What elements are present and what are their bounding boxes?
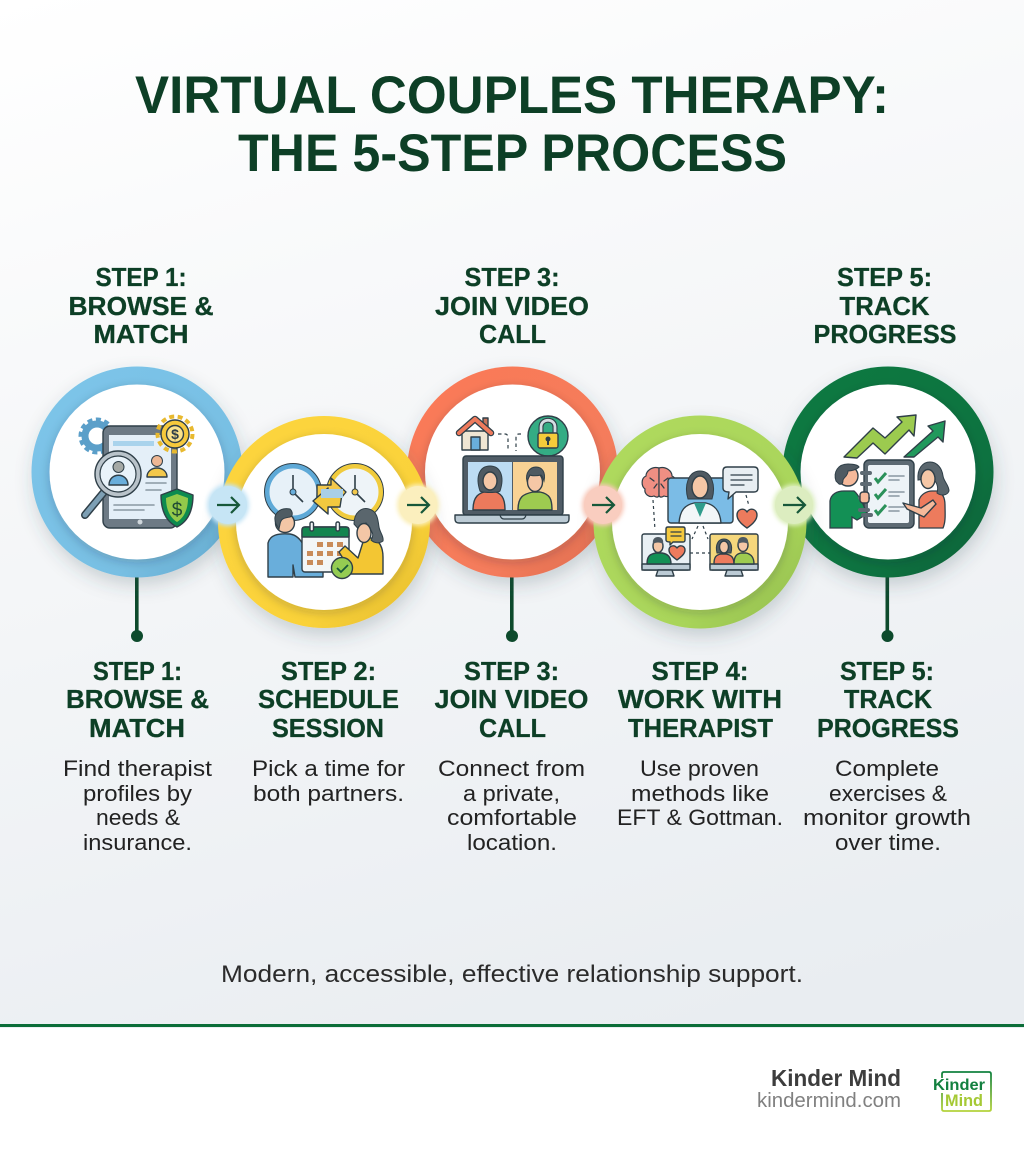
text block: step 2 [252,656,405,806]
text block: step 2: STEP 2: [281,656,376,686]
icon: laptop video call with house and lock [455,416,569,523]
top heading: step 5: STEP 5: [837,262,932,292]
icon: tablet search with gears and shield [80,416,193,528]
title: VIRTUAL COUPLES THERAPY: [135,66,889,125]
text block: step 4: STEP 4: [652,656,748,686]
top heading: step 1: BROWSE & [68,291,214,321]
text block: step 5: STEP 5: [840,656,934,686]
text block: step 3: a private, [463,781,560,806]
top heading: step 1: STEP 1: [96,262,186,292]
text block: step 2: SCHEDULE [258,684,399,714]
connector: step 5 [882,575,894,642]
text block: step 3: STEP 3: [464,656,559,686]
text block: step 4 [617,656,783,830]
text block: step 5: over time. [835,830,941,855]
text block: step 1: STEP 1: [93,656,182,686]
icon: tablet search with gears and shield: $ [171,426,179,442]
text block: step 5: PROGRESS [817,713,959,743]
logo: Kinder [933,1077,985,1094]
text block: step 1: insurance. [83,830,192,855]
top heading: step 5 [814,262,956,349]
title [135,66,889,183]
top heading: step 3: STEP 3: [464,262,560,292]
text block: step 1: needs & [96,805,180,830]
text block: step 4: THERAPIST [628,713,773,743]
text block: step 3: location. [467,830,557,855]
text block: step 5: monitor growth [803,805,971,830]
text block: step 4: methods like [631,781,769,806]
top heading: step 5: TRACK [840,291,930,321]
top heading: step 1 [68,262,214,349]
arrow badge: step 3 to 4 [582,484,624,526]
top heading: step 5: PROGRESS [814,319,956,349]
text block: step 2: SESSION [272,713,384,743]
ring: step 3 [407,366,618,578]
footer band [0,1024,1024,1154]
footer brand text: Kinder Mind [771,1065,901,1091]
logo: Mind [945,1091,983,1110]
ring: step 5 [782,366,994,578]
logo [933,1072,991,1111]
text block: step 5: TRACK [844,684,932,714]
text block: step 2: both partners. [253,781,404,806]
text block: step 5 [803,656,971,855]
text block: step 1: BROWSE & [66,684,209,714]
text block: step 1: MATCH [89,713,185,743]
top heading: step 3 [435,262,589,349]
text block: step 3: comfortable [447,805,577,830]
ring: step 2 [218,416,430,628]
top heading: step 1: MATCH [94,319,188,349]
text block: step 2: Pick a time for [252,756,405,781]
icon: progress arrows, checklist and couple [830,415,949,528]
icon: therapist with brain, chat and remote couple [642,467,758,576]
text block: step 5: exercises & [829,781,947,806]
ring: step 4 [594,416,806,628]
text block: step 4: Use proven [640,756,759,781]
top heading: step 3: JOIN VIDEO [435,291,589,321]
footer brand text: kindermind.com [757,1090,901,1112]
text block: step 3: JOIN VIDEO [434,684,588,714]
arrow badge: step 1 to 2 [207,484,249,526]
tagline: Modern, accessible, effective relationship support. [221,961,803,988]
text block: step 1: Find therapist [63,756,212,781]
text block: step 1: profiles by [83,781,192,806]
footer brand text [757,1065,901,1112]
arrow badge: step 4 to 5 [773,484,815,526]
title: THE 5-STEP PROCESS [238,124,787,183]
arrow badge: step 2 to 3 [397,484,439,526]
text block: step 1 [63,656,212,855]
connector: step 3 [506,575,518,642]
top heading: step 3: CALL [479,319,546,349]
text block: step 3: CALL [479,713,546,743]
text block: step 4: EFT & Gottman. [617,805,783,830]
text block: step 5: Complete [835,756,939,781]
icon: two clocks, calendar and couple [264,464,384,578]
text block: step 3 [434,656,588,855]
ring: step 1 [32,366,242,578]
text block: step 4: WORK WITH [618,684,782,714]
text block: step 3: Connect from [438,756,585,781]
connector: step 1 [131,575,143,642]
icon: tablet search with gears and shield: $ [172,500,183,521]
